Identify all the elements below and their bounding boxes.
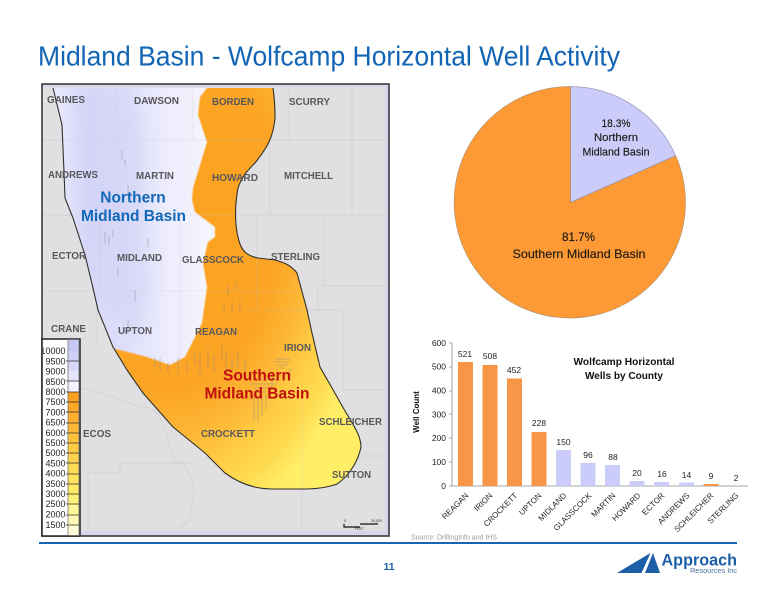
logo: Approach Resources Inc: Resources Inc <box>690 566 737 575</box>
pie label: northern: Northern <box>594 132 638 144</box>
bars <box>458 362 718 486</box>
pie label: southern: Southern Midland Basin <box>512 247 646 261</box>
logo: Approach Resources Inc <box>617 550 737 575</box>
county labels: SCURRY <box>289 97 330 108</box>
legend labels: 7500 <box>45 397 66 407</box>
legend labels: 8000 <box>45 387 66 397</box>
label: northern midland basin <box>81 190 186 225</box>
bar values: 96 <box>583 450 593 460</box>
category labels: GLASSCOCK <box>552 491 594 533</box>
county labels: CRANE <box>51 324 86 335</box>
bar values: 228 <box>532 418 546 428</box>
bar values: 521 <box>458 349 472 359</box>
legend labels: 6000 <box>45 428 66 438</box>
scale bar: 30,000 <box>371 519 382 523</box>
category labels <box>440 491 740 534</box>
category labels: ECTOR <box>640 491 667 517</box>
basin outline <box>53 88 361 489</box>
bar values: 88 <box>608 452 618 462</box>
map frame <box>42 84 389 536</box>
category labels: UPTON <box>517 491 544 517</box>
county labels: GAINES <box>47 95 85 106</box>
y axis title: Well Count <box>412 391 421 433</box>
county labels <box>47 95 383 481</box>
chart title: Wells by County <box>585 370 663 382</box>
legend labels: 5500 <box>45 438 66 448</box>
legend labels: 8500 <box>45 377 66 387</box>
legend labels: 2500 <box>45 499 66 509</box>
county labels: GLASSCOCK <box>182 255 245 266</box>
legend labels: 4500 <box>45 458 66 468</box>
faint county lines inside the basin <box>64 88 306 488</box>
county labels: BORDEN <box>212 97 254 108</box>
county labels: CROCKETT <box>201 429 255 440</box>
county labels: MIDLAND <box>117 253 162 264</box>
category labels: STERLING <box>706 491 740 526</box>
scale bar <box>344 519 382 531</box>
county labels: ECOS <box>83 429 111 440</box>
legend: depth scale <box>40 339 80 536</box>
scale bar: FEET <box>355 527 365 531</box>
label: northern midland basin: Midland Basin <box>81 208 186 225</box>
county labels: SUTTON <box>332 470 371 481</box>
county labels: HOWARD <box>212 173 258 184</box>
county labels: STERLING <box>271 252 320 263</box>
bar chart <box>412 338 748 534</box>
y axis labels: 600 <box>432 338 446 348</box>
label: southern midland basin: Southern <box>223 368 291 384</box>
category labels: MARTIN <box>589 491 618 519</box>
logo mark <box>617 553 660 573</box>
legend colour bar <box>68 340 79 536</box>
bar values: 16 <box>657 469 667 479</box>
basin shading <box>42 84 365 504</box>
y axis labels: 500 <box>432 362 446 372</box>
bar values: 2 <box>734 473 739 483</box>
source note: Source: DrillingInfo and IHS <box>411 534 497 542</box>
footer rule <box>39 542 737 544</box>
panel: map <box>42 84 389 536</box>
label: southern midland basin: Midland Basin <box>204 386 310 402</box>
category labels: SCHLEICHER <box>673 491 716 534</box>
legend labels: 2000 <box>45 510 66 520</box>
bar values: 9 <box>709 471 714 481</box>
bar values <box>458 349 739 483</box>
county labels: ANDREWS <box>48 170 98 181</box>
county labels: MARTIN <box>136 171 174 182</box>
y axis labels: 0 <box>441 481 446 491</box>
slice: southern <box>454 87 685 318</box>
bar values: 14 <box>682 470 691 480</box>
legend labels: 1500 <box>45 520 66 530</box>
category labels: CROCKETT <box>482 491 519 529</box>
bar values: 452 <box>507 365 521 375</box>
well clusters <box>105 150 290 422</box>
category labels: IRION <box>472 491 495 513</box>
label: northern midland basin: Northern <box>100 190 166 206</box>
page number: 11 <box>383 561 395 573</box>
county labels: MITCHELL <box>284 171 333 182</box>
y axis labels: 400 <box>432 386 446 396</box>
legend labels: 3500 <box>45 479 66 489</box>
legend labels: 9500 <box>45 356 66 366</box>
category labels: ANDREWS <box>656 491 691 526</box>
legend labels: 6500 <box>45 418 66 428</box>
legend labels: 7000 <box>45 408 66 418</box>
category labels: MIDLAND <box>537 491 569 523</box>
legend labels: 10000 <box>40 346 66 356</box>
slice: northern <box>571 87 676 202</box>
county labels: REAGAN <box>195 327 237 338</box>
pie label: southern: 81.7% <box>562 230 595 244</box>
county labels: SCHLEICHER <box>319 417 383 428</box>
county labels: ECTOR <box>52 251 87 262</box>
bar values: 150 <box>556 437 571 447</box>
y axis labels: 100 <box>432 457 446 467</box>
category labels: REAGAN <box>440 491 471 521</box>
axes <box>452 343 748 486</box>
pie label: northern: 18.3% <box>602 118 631 130</box>
category labels: HOWARD <box>610 491 643 523</box>
bar values: 508 <box>483 351 497 361</box>
legend labels: 3000 <box>45 489 66 499</box>
bar values: 20 <box>632 468 642 478</box>
pie chart <box>454 87 685 318</box>
logo: Approach Resources Inc: Approach <box>662 550 737 570</box>
pie label: northern <box>582 118 650 158</box>
legend labels: 5000 <box>45 448 66 458</box>
pie label: northern: Midland Basin <box>582 146 650 158</box>
y axis labels <box>432 338 446 491</box>
y axis labels: 200 <box>432 433 446 443</box>
county labels: IRION <box>284 343 311 354</box>
pie label: southern <box>512 230 646 261</box>
county lines <box>42 88 387 532</box>
county labels: UPTON <box>118 326 152 337</box>
legend labels: 4000 <box>45 468 66 478</box>
y axis labels: 300 <box>432 410 446 420</box>
scale bar: 0 <box>344 519 346 523</box>
legend labels <box>43 348 66 528</box>
county labels: DAWSON <box>134 96 179 107</box>
legend labels: 9000 <box>45 366 66 376</box>
chart title <box>574 356 675 382</box>
label: southern midland basin <box>204 368 310 402</box>
chart title: Wolfcamp Horizontal <box>574 356 675 368</box>
title: Midland Basin - Wolfcamp Horizontal Well Activity <box>38 40 620 72</box>
